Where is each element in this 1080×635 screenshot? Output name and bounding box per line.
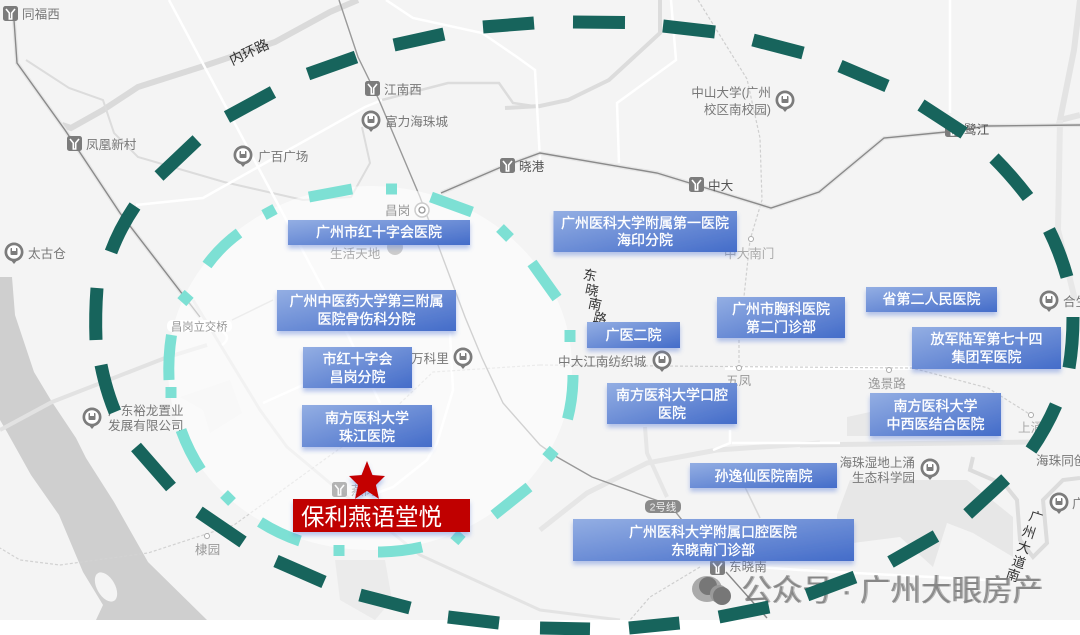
road name: 内环路: 内环路 — [227, 36, 271, 68]
hospital: 广州医科大学附属口腔医院东晓南门诊部: 东晓南门诊部 — [671, 542, 755, 558]
label: 同福西 — [3, 6, 60, 22]
hospital: 广州中医药大学第三附属医院骨伤科分院: 医院骨伤科分院 — [318, 311, 416, 327]
hospital: 广州市胸科医院第二门诊部: 广州市胸科医院 — [732, 301, 830, 317]
label: 东晓南 — [710, 559, 767, 575]
label: 2号线: 2号线 — [650, 500, 677, 514]
label: 五凤: 五凤 — [726, 374, 752, 388]
label: 万科里 — [411, 348, 472, 369]
label: 2号线 — [645, 500, 681, 514]
hospital: 南方医科大学中西医结合医院: 中西医结合医院 — [886, 416, 984, 432]
label: 广 — [1050, 492, 1080, 514]
inner circle highlight — [168, 186, 572, 550]
road name: 东晓南路: 路 — [592, 310, 609, 327]
label: 海珠湿地 — [839, 456, 940, 485]
label: 鹭江: 鹭江 — [964, 122, 990, 137]
hospital: 市红十字会昌岗分院 — [303, 347, 412, 388]
hospital: 广州医科大学附属第一医院海印分院 — [554, 211, 737, 252]
label: 昌岗: 昌岗 — [385, 204, 410, 218]
river — [0, 277, 207, 620]
watermark text: 公众号 · 广州大眼房产 — [742, 574, 1044, 608]
hospital: 广州市胸科医院第二门诊部 — [717, 297, 845, 338]
hospital: 省第二人民医院: 省第二人民医院 — [882, 291, 980, 307]
road name: 广州大道南: 南 — [1004, 566, 1022, 585]
hospital: 南方医科大学中西医结合医院 — [870, 393, 1001, 436]
label: 生活天地: 生活天地 — [330, 247, 381, 261]
label: 广东裕龙置业: 广东裕龙置业 — [108, 404, 184, 418]
hospital: 广州中医药大学第三附属医院骨伤科分院: 广州中医药大学第三附属 — [290, 293, 444, 309]
label: 海珠湿地: 生态科学园 — [852, 470, 915, 485]
label: 广东裕龙置业 — [82, 404, 184, 433]
hospital: 南方医科大学口腔医院: 南方医科大学口腔 — [616, 387, 728, 403]
road name: 广州大道南: 大 — [1015, 538, 1033, 557]
metro lines — [12, 21, 183, 294]
road name: 东晓南路 — [582, 267, 609, 327]
label: 上涌 — [1018, 412, 1043, 435]
icon: chat bubbles — [692, 576, 731, 605]
hospital: 南方医科大学珠江医院: 珠江医院 — [339, 428, 395, 444]
road name: 广州大道南: 道 — [1010, 553, 1028, 572]
label: 上涌: 上涌 — [1018, 421, 1043, 435]
label: 富力海珠城: 富力海珠城 — [385, 114, 448, 129]
road name: 东晓南路: 东 — [582, 267, 598, 284]
label: 凤凰新村 — [67, 136, 137, 152]
hospital: 南方医科大学珠江医院 — [302, 405, 432, 447]
hospital: 广州市红十字会医院: 广州市红十字会医院 — [316, 224, 442, 240]
label: 燕岗: 燕岗 — [351, 484, 376, 498]
label: 鹭江 — [945, 122, 990, 137]
label: 昌岗立交桥: 昌岗立交桥 — [171, 320, 228, 334]
hospital: 省第二人民医院 — [866, 287, 997, 312]
label: 中山大学 — [691, 85, 794, 117]
watermark: WeChat official account — [692, 574, 1044, 608]
label: 太古仓 — [4, 242, 66, 264]
label: 中大南门: 中大南门 — [724, 246, 774, 261]
hospital: 市红十字会昌岗分院: 昌岗分院 — [330, 369, 386, 385]
label: 中山大学: 校区南校园) — [704, 102, 771, 117]
hospital: 放军陆军第七十四集团军医院 — [912, 327, 1061, 369]
hospital: 南方医科大学珠江医院: 南方医科大学 — [325, 410, 409, 426]
label: 中大南门 — [724, 236, 774, 261]
hospital: 孙逸仙医院南院: 孙逸仙医院南院 — [714, 468, 812, 484]
road name: 广州大道南: 广 — [1027, 508, 1045, 527]
label: 富力海珠城 — [362, 110, 448, 132]
label: 江南西 — [365, 81, 422, 97]
label: 凤凰新村: 凤凰新村 — [86, 137, 137, 152]
green land zones — [837, 480, 1013, 567]
label: 东晓南: 东晓南 — [729, 559, 767, 574]
label: 江南西: 江南西 — [384, 82, 422, 97]
hospital: 广医二院 — [587, 322, 680, 348]
hospital: 南方医科大学中西医结合医院: 南方医科大学 — [894, 398, 978, 414]
hospital: 放军陆军第七十四集团军医院: 放军陆军第七十四 — [930, 331, 1042, 347]
label: 棣园 — [195, 534, 220, 557]
label: 广东裕龙置业: 发展有限公司 — [108, 418, 184, 433]
hospital: 放军陆军第七十四集团军医院: 集团军医院 — [952, 349, 1022, 365]
label: 同福西: 同福西 — [22, 8, 60, 22]
label: 中大江南纺织城: 中大江南纺织城 — [558, 354, 647, 369]
ring: 1 km light teal dashed — [169, 189, 573, 556]
label: 中大 — [689, 177, 734, 193]
label: 生活天地 — [330, 239, 403, 261]
label: 晓港 — [500, 158, 545, 174]
label: 逸景路 — [868, 368, 906, 391]
road name: 广州大道南: 州 — [1020, 523, 1038, 542]
hospital: 广州医科大学附属口腔医院东晓南门诊部 — [573, 519, 854, 561]
label: 海珠湿地: 海珠湿地上涌 — [839, 456, 915, 470]
road name: 东晓南路: 南 — [587, 296, 603, 313]
label: 中大江南纺织城 — [558, 350, 672, 372]
project name: 保利燕语堂悦 — [293, 499, 470, 532]
label: 中大: 中大 — [708, 179, 734, 193]
hospital: 广州市胸科医院第二门诊部: 第二门诊部 — [746, 319, 816, 335]
hospital: 广州市红十字会医院 — [288, 220, 470, 245]
hospital: 广医二院: 广医二院 — [606, 327, 662, 343]
label: 广百广场 — [234, 146, 308, 167]
label: 中山大学: 中山大学(广州 — [691, 85, 771, 100]
label: 晓港: 晓港 — [519, 160, 545, 174]
label: 燕岗 — [332, 482, 376, 498]
project name: 保利燕语堂悦: 保利燕语堂悦 — [301, 504, 442, 530]
icon: red star — [349, 461, 385, 499]
label: 万科里: 万科里 — [411, 352, 449, 366]
hospital labels — [277, 211, 1061, 561]
road name: 广州大道南 — [1004, 508, 1045, 585]
dashed metro — [698, 0, 762, 368]
road name: 东晓南路: 晓 — [584, 282, 600, 299]
label: 昌岗 — [385, 203, 429, 218]
label: 棣园: 棣园 — [195, 543, 220, 557]
label: 合生 — [1040, 290, 1080, 312]
project marker — [293, 461, 470, 532]
label: 五凤 — [726, 366, 752, 388]
hospital: 广州医科大学附属第一医院海印分院: 海印分院 — [617, 232, 673, 248]
hospital: 市红十字会昌岗分院: 市红十字会 — [322, 351, 392, 367]
hospital: 广州医科大学附属第一医院海印分院: 广州医科大学附属第一医院 — [561, 215, 729, 231]
hospital: 孙逸仙医院南院 — [690, 463, 837, 488]
hospital: 南方医科大学口腔医院 — [607, 383, 737, 424]
hospital: 南方医科大学口腔医院: 医院 — [658, 405, 686, 421]
label: 逸景路: 逸景路 — [868, 376, 906, 391]
hospital: 广州医科大学附属口腔医院东晓南门诊部: 广州医科大学附属口腔医院 — [629, 524, 797, 540]
watermark text shadow: 公众号 · 广州大眼房产 — [741, 574, 1043, 608]
hospital: 广州中医药大学第三附属医院骨伤科分院 — [277, 290, 456, 331]
label: 太古仓: 太古仓 — [28, 247, 66, 261]
label: 广百广场: 广百广场 — [258, 150, 308, 164]
